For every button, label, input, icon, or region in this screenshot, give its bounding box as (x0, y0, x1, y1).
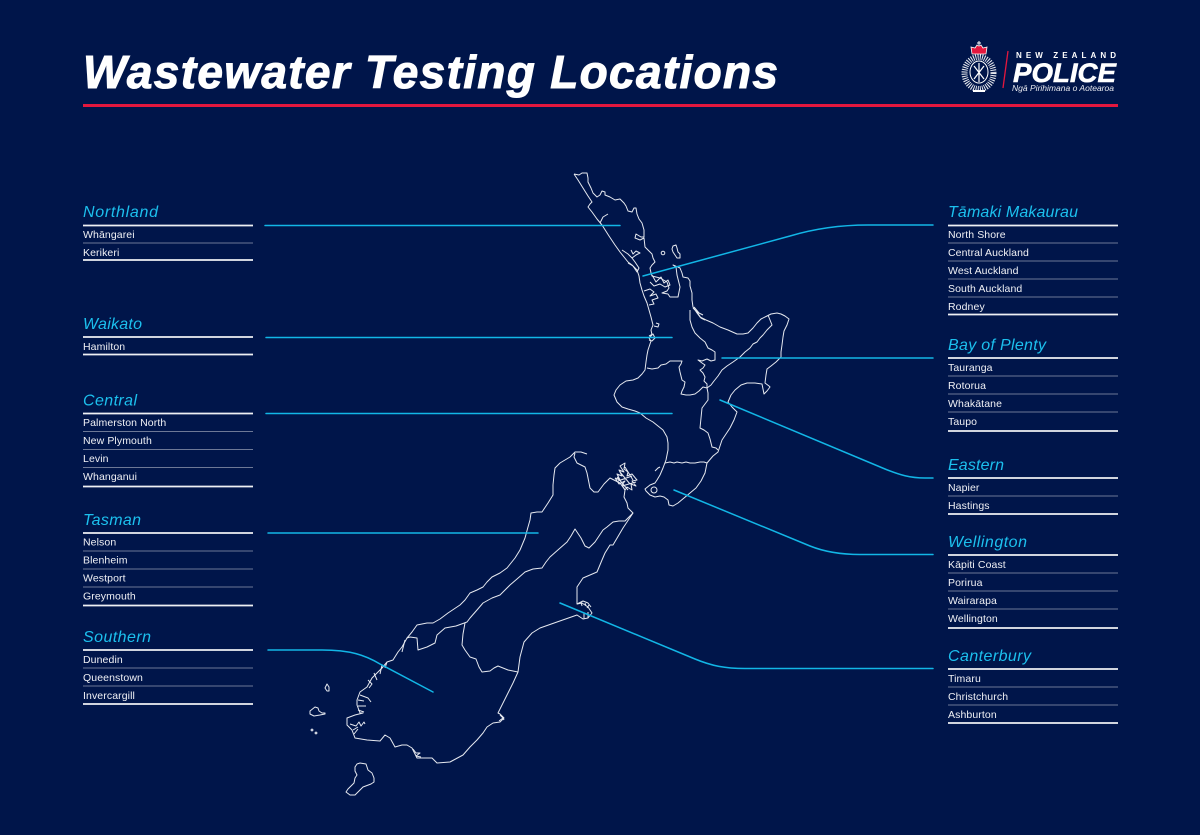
list: Northland locations: Whāngarei (83, 229, 135, 241)
logo: New Zealand Police (964, 41, 1117, 93)
panel: Waikato (83, 316, 253, 354)
list: Tāmaki Makaurau locations (948, 229, 1029, 313)
panel: Tāmaki Makaurau (948, 204, 1118, 314)
list: Tāmaki Makaurau locations: North Shore (948, 229, 1006, 241)
heading: Wellington: Wellington (948, 534, 1027, 551)
list: Wellington locations (948, 559, 1006, 625)
list: Canterbury locations: Christchurch (948, 691, 1008, 703)
list: Wellington locations: Porirua (948, 577, 983, 589)
list: Eastern locations: Hastings (948, 500, 990, 512)
panel: Wellington (948, 534, 1118, 628)
North Island outline (574, 173, 789, 506)
list: Waikato locations: Hamilton (83, 341, 125, 353)
connector: Tasman (268, 532, 538, 534)
logo: New Zealand Police: Ngā Pirihimana o Aotearoa (1012, 84, 1115, 93)
map of New Zealand (310, 173, 789, 795)
list: Tāmaki Makaurau locations: West Auckland (948, 265, 1019, 277)
North Island region borders (647, 310, 772, 493)
list: Tāmaki Makaurau locations: Rodney (948, 301, 985, 313)
heading: Bay of Plenty: Bay of Plenty (948, 337, 1047, 354)
list: Bay of Plenty locations: Taupo (948, 416, 977, 428)
list: Northland locations: Kerikeri (83, 247, 119, 259)
connector: Wellington (674, 490, 933, 554)
list: Central locations: New Plymouth (83, 435, 152, 447)
list: Bay of Plenty locations: Tauranga (948, 362, 993, 374)
heading: Central: Central (83, 392, 137, 410)
connector: Waikato (266, 336, 672, 338)
list: Bay of Plenty locations: Rotorua (948, 380, 986, 392)
list: Tasman locations: Greymouth (83, 590, 136, 602)
list: Southern locations (83, 654, 143, 702)
list: Canterbury locations (948, 673, 1008, 721)
heading: Canterbury: Canterbury (948, 648, 1032, 665)
connector: Tāmaki Makaurau (643, 225, 933, 276)
heading: Northland: Northland (83, 204, 159, 221)
list: Tasman locations: Nelson (83, 536, 116, 548)
panel: Tasman (83, 512, 253, 606)
list: Central locations: Whanganui (83, 471, 137, 483)
logo: New Zealand Police: POLICE (1013, 58, 1117, 88)
panel: Northland (83, 204, 253, 260)
list: Northland locations (83, 229, 135, 259)
list: Southern locations: Dunedin (83, 654, 123, 666)
list: Bay of Plenty locations: Whakātane (948, 398, 1002, 410)
South Island outline (347, 452, 637, 763)
list: Central locations: Levin (83, 453, 109, 465)
panel: Central (83, 392, 253, 486)
icon: police crest (964, 41, 994, 91)
list: Central locations (83, 417, 166, 483)
list: Wellington locations: Wairarapa (948, 595, 997, 607)
list: Tasman locations: Westport (83, 572, 126, 584)
connector: Eastern (720, 400, 933, 478)
heading: Tasman: Tasman (83, 512, 141, 529)
list: Tasman locations: Blenheim (83, 554, 128, 566)
connector: Southern (268, 650, 433, 692)
Stewart Island (346, 763, 374, 795)
connector: Bay of Plenty (722, 357, 933, 359)
list: Tāmaki Makaurau locations: South Auckland (948, 283, 1022, 295)
heading: Waikato: Waikato (83, 316, 142, 333)
list: Wellington locations: Wellington (948, 613, 998, 625)
panel: Eastern (948, 457, 1118, 514)
list: Southern locations: Queenstown (83, 672, 143, 684)
connector: Canterbury (560, 603, 933, 668)
heading: Southern: Southern (83, 629, 151, 646)
connector: Northland (265, 224, 620, 226)
list: Southern locations: Invercargill (83, 690, 135, 702)
connector: Central (266, 412, 672, 414)
list: Central locations: Palmerston North (83, 417, 166, 429)
list: Tāmaki Makaurau locations: Central Auckland (948, 247, 1029, 259)
panel: Canterbury (948, 648, 1118, 723)
list: Eastern locations: Napier (948, 482, 980, 494)
list: Canterbury locations: Ashburton (948, 709, 997, 721)
list: Eastern locations (948, 482, 990, 512)
offshore islands (310, 245, 680, 734)
list: Bay of Plenty locations (948, 362, 1002, 428)
title: Wastewater Testing Locations (83, 46, 778, 98)
panel: Bay of Plenty (948, 337, 1118, 431)
panel: Southern (83, 629, 253, 704)
heading: Eastern: Eastern (948, 457, 1004, 474)
list: Canterbury locations: Timaru (948, 673, 981, 685)
heading: Tāmaki Makaurau: Tāmaki Makaurau (948, 204, 1078, 221)
logo text: NEW ZEALAND (1016, 51, 1116, 60)
list: Tasman locations (83, 536, 136, 602)
logo divider slash (1003, 51, 1008, 88)
red title rule (83, 104, 1118, 107)
list: Wellington locations: Kāpiti Coast (948, 559, 1006, 571)
